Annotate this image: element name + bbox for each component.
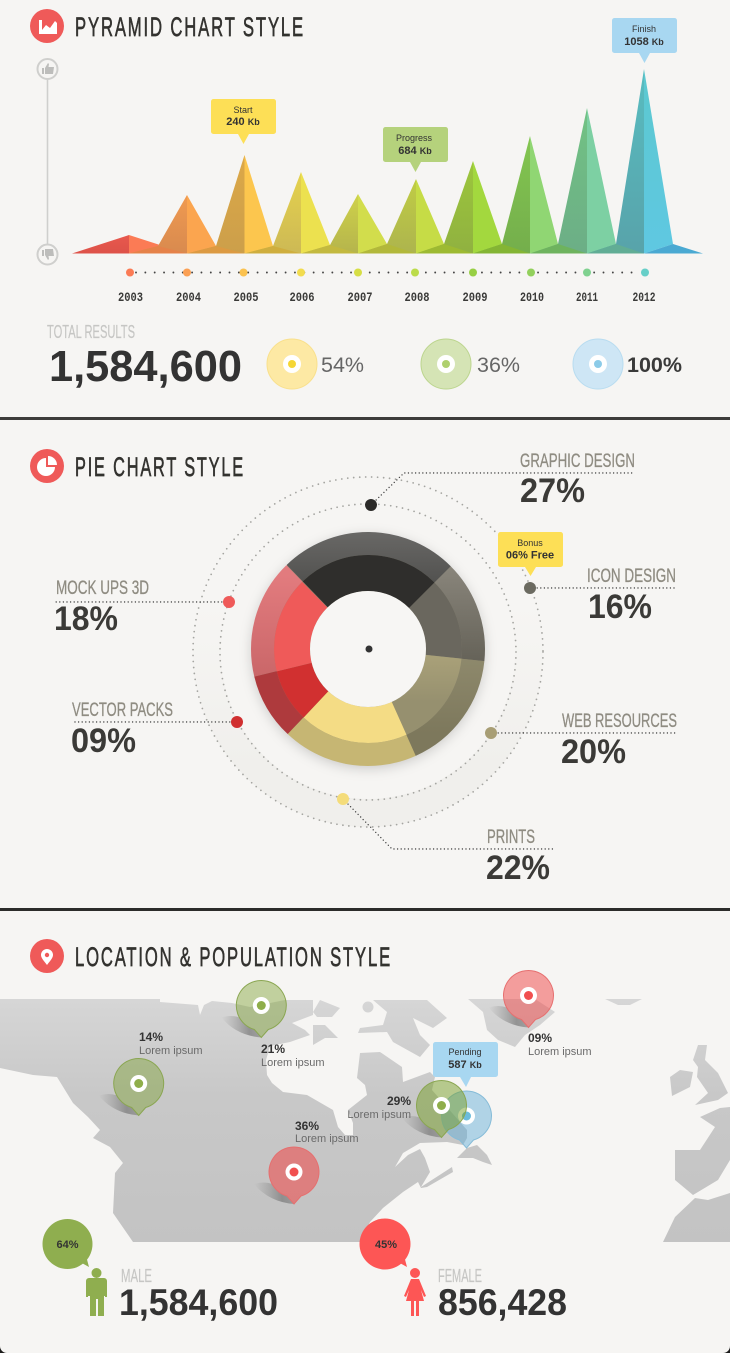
female stat: FEMALE bbox=[438, 1266, 482, 1286]
callout: progress bbox=[383, 127, 448, 172]
timeline dots bbox=[126, 268, 649, 276]
icon: location badge bbox=[30, 939, 64, 973]
map label: 09% bbox=[528, 1031, 592, 1058]
callout: start bbox=[211, 99, 276, 144]
label: vector packs bbox=[71, 700, 173, 760]
callout: pending: 587 Kb bbox=[448, 1059, 482, 1071]
male stat: 1,584,600 bbox=[119, 1282, 278, 1323]
label: web resources bbox=[561, 711, 677, 771]
panel: pie chart section bbox=[0, 420, 730, 908]
pin: green 29% bbox=[416, 1080, 466, 1138]
label: prints: 22% bbox=[486, 849, 550, 887]
panel: pyramid chart section bbox=[0, 0, 730, 417]
label: mock ups 3d: 18% bbox=[54, 600, 118, 638]
callout: finish bbox=[612, 18, 677, 63]
callout: bonus: Bonus bbox=[517, 538, 543, 548]
label: mock ups 3d bbox=[54, 578, 149, 638]
icon: female figure bbox=[404, 1268, 426, 1316]
donut chart bbox=[252, 532, 484, 766]
map label: 29%: Lorem ipsum bbox=[347, 1109, 411, 1121]
year labels: 2011 bbox=[576, 290, 598, 305]
female stat: 856,428 bbox=[438, 1282, 567, 1323]
label: icon design bbox=[587, 566, 676, 626]
pin shadows bbox=[99, 1006, 528, 1204]
year labels: 2009 bbox=[462, 290, 488, 305]
pin: red 09% bbox=[504, 970, 554, 1028]
map label: 21%: 21% bbox=[261, 1042, 285, 1056]
stat: 100% bbox=[573, 339, 682, 389]
leader lines bbox=[55, 473, 677, 849]
year labels: 2003 bbox=[118, 290, 143, 305]
callout: progress: Progress bbox=[396, 133, 433, 143]
label: mock ups 3d: MOCK UPS 3D bbox=[56, 578, 149, 599]
stat: 54% bbox=[267, 339, 364, 389]
callout: bonus bbox=[498, 532, 563, 576]
male stat: MALE bbox=[121, 1266, 152, 1286]
female stat bbox=[360, 1218, 567, 1323]
callout: start: Start bbox=[233, 105, 253, 115]
heading: pie chart style: PIE CHART STYLE bbox=[75, 452, 245, 482]
year labels: 2007 bbox=[348, 290, 372, 305]
pin: blue pending bbox=[442, 1091, 492, 1148]
year labels: 2006 bbox=[290, 290, 315, 305]
dotted orbit rings bbox=[193, 477, 543, 827]
callout: finish: 1058 Kb bbox=[624, 36, 664, 48]
label: graphic design: 27% bbox=[520, 472, 585, 510]
pin: red 36% bbox=[269, 1147, 319, 1204]
world map bbox=[0, 999, 730, 1242]
label: icon design: ICON DESIGN bbox=[587, 566, 676, 587]
callout: start: 240 Kb bbox=[226, 116, 260, 128]
callout: pending bbox=[433, 1042, 498, 1087]
map label: 21% bbox=[261, 1042, 325, 1069]
year labels: 2010 bbox=[520, 290, 544, 305]
total results: TOTAL RESULTS bbox=[47, 322, 135, 342]
map label: 21%: Lorem ipsum bbox=[261, 1057, 325, 1069]
label: web resources: 20% bbox=[561, 733, 626, 771]
year labels: 2004 bbox=[176, 290, 201, 305]
stat: 36% bbox=[421, 339, 520, 389]
label: vector packs: 09% bbox=[71, 722, 136, 760]
callout: progress: 684 Kb bbox=[398, 145, 432, 157]
panel: location and population section bbox=[0, 911, 730, 1353]
callout: bonus: 06% Free bbox=[506, 550, 554, 562]
label: web resources: WEB RESOURCES bbox=[562, 711, 677, 732]
map label: 14%: 14% bbox=[139, 1030, 163, 1044]
pin: green 21% bbox=[236, 980, 286, 1038]
year labels: 2008 bbox=[404, 290, 430, 305]
pin: green 14% bbox=[114, 1058, 164, 1116]
map label: 36%: 36% bbox=[295, 1119, 319, 1133]
stat: 36%: 36% bbox=[477, 354, 520, 377]
stat: 54%: 54% bbox=[321, 354, 364, 377]
label: vector packs: VECTOR PACKS bbox=[72, 700, 173, 721]
label: icon design: 16% bbox=[588, 588, 652, 626]
icon: male figure bbox=[86, 1268, 107, 1316]
stat: 100%: 100% bbox=[627, 354, 682, 377]
total results: 1,584,600 bbox=[49, 342, 242, 391]
map label: 29% bbox=[347, 1094, 411, 1121]
total results bbox=[47, 322, 242, 391]
heading: location and population style: LOCATION & POPULATION STYLE bbox=[75, 942, 392, 972]
callout: finish: Finish bbox=[632, 24, 656, 34]
year labels bbox=[118, 290, 656, 305]
label: graphic design: GRAPHIC DESIGN bbox=[520, 451, 635, 472]
callout: pending: Pending bbox=[448, 1047, 482, 1057]
map label: 14%: Lorem ipsum bbox=[139, 1045, 203, 1057]
map label: 36%: Lorem ipsum bbox=[295, 1133, 359, 1145]
year labels: 2005 bbox=[234, 290, 259, 305]
pyramid chart bbox=[72, 69, 703, 254]
slider scale with thumb icons bbox=[38, 59, 58, 264]
bubble: 64% bbox=[42, 1219, 92, 1269]
year labels: 2012 bbox=[632, 290, 656, 305]
map label: 09%: 09% bbox=[528, 1031, 552, 1045]
map label: 36% bbox=[295, 1119, 359, 1145]
label: prints: PRINTS bbox=[487, 827, 535, 848]
icon: line chart badge bbox=[30, 9, 64, 43]
heading: pyramid chart style: PYRAMID CHART STYLE bbox=[75, 12, 305, 42]
bubble: 45% bbox=[360, 1218, 410, 1270]
map label: 14% bbox=[139, 1030, 203, 1057]
label: prints bbox=[486, 827, 550, 887]
map label: 09%: Lorem ipsum bbox=[528, 1046, 592, 1058]
map label: 29%: 29% bbox=[387, 1094, 411, 1108]
label: graphic design bbox=[520, 451, 635, 510]
icon: pie badge bbox=[30, 449, 64, 483]
bubble: 45%: 45% bbox=[375, 1239, 397, 1251]
marker dots bbox=[223, 499, 536, 805]
bubble: 64%: 64% bbox=[56, 1239, 79, 1251]
male stat bbox=[42, 1219, 278, 1323]
